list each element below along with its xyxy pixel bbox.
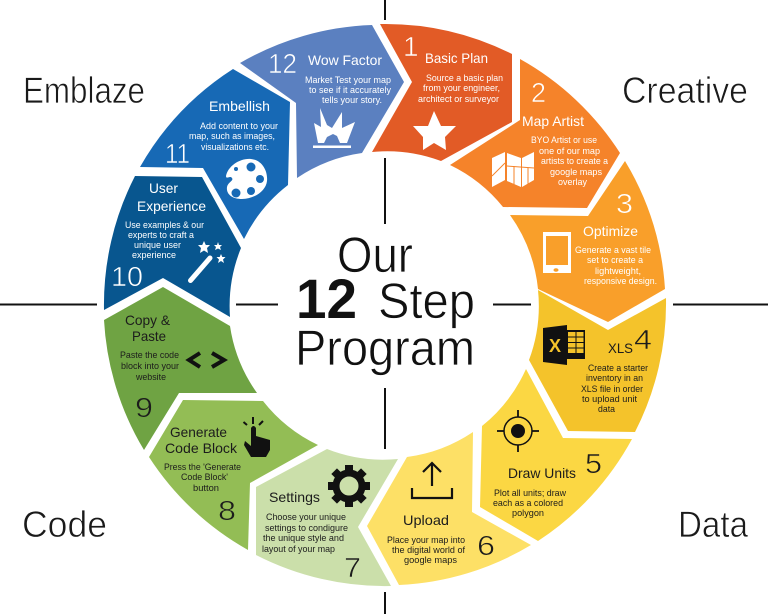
step title: [137, 180, 206, 214]
step description: [120, 350, 179, 383]
step description: data: [598, 404, 616, 415]
segment shape 11: [140, 69, 290, 239]
step description: overlay: [558, 177, 587, 188]
step description: settings to condigure: [265, 523, 348, 534]
heading: Creative: Creative: [622, 70, 748, 111]
panel: step 4 XLS: [529, 290, 666, 432]
step title: User: [149, 180, 178, 196]
step description: the digital world of: [392, 545, 465, 556]
step description: artists to create a: [541, 156, 609, 167]
title: Our 12 Step Program: Our: [337, 227, 413, 283]
panel: step 2 Map Artist: [450, 59, 620, 208]
step title: Wow Factor: [308, 52, 382, 68]
step description: [387, 535, 465, 566]
step number 4: 4: [634, 324, 652, 355]
panel: step 1 Basic Plan: [372, 24, 512, 161]
step description: set to create a: [587, 255, 644, 266]
step description: map, such as images,: [189, 131, 275, 142]
title: Our 12 Step Program: Program: [295, 320, 475, 376]
segment shape 8: [149, 400, 318, 550]
step description: XLS file in order: [581, 384, 643, 395]
step description: Plot all units; draw: [494, 488, 566, 499]
step description: Press the 'Generate: [164, 462, 241, 473]
step description: [575, 245, 657, 287]
step description: [189, 121, 278, 153]
icon: Excel file: [543, 325, 585, 365]
step number 6: 6: [477, 530, 495, 561]
step description: responsive design.: [584, 276, 657, 287]
step description: lightweight,: [595, 266, 641, 277]
icon: Excel file: X: [549, 336, 561, 356]
title: Our 12 Step Program: Step: [378, 273, 475, 329]
heading: Code: Code: [22, 504, 107, 545]
step description: [493, 488, 566, 519]
step description: tells your story.: [322, 95, 382, 106]
panel: step 11 Embellish: [140, 69, 290, 239]
title: Our 12 Step Program: [295, 227, 475, 376]
step title: [165, 424, 238, 456]
step description: google maps: [550, 167, 602, 178]
segment shape 5: [480, 369, 632, 541]
icon: target: [497, 410, 539, 452]
step title: Basic Plan: [425, 50, 488, 66]
panel: step 3 Optimize: [510, 161, 665, 322]
segment shape 9: [104, 287, 257, 450]
step title: Settings: [269, 489, 320, 505]
step number 5: 5: [585, 448, 602, 479]
step description: Paste the code: [120, 350, 179, 361]
step description: [581, 363, 648, 415]
step description: Add content to your: [200, 121, 278, 132]
step description: polygon: [512, 508, 544, 519]
step title: Copy &: [125, 312, 171, 328]
step description: block into your: [121, 361, 179, 372]
icon: folded map: [492, 152, 534, 187]
step description: one of our map: [539, 146, 600, 157]
step description: unique user: [134, 240, 181, 251]
step number 11: 11: [165, 138, 190, 169]
step description: experts to craft a: [128, 230, 195, 241]
step description: to see if it accurately: [309, 85, 391, 96]
panel: step 9 Copy & Paste: [104, 287, 257, 450]
step title: Generate: [170, 424, 227, 440]
step description: Source a basic plan: [426, 73, 503, 84]
step description: the unique style and: [263, 533, 344, 544]
step description: from your engineer,: [423, 83, 500, 94]
step number 7: 7: [344, 552, 361, 583]
step description: [531, 135, 609, 188]
segment shape 4: [529, 290, 666, 432]
step description: Choose your unique: [266, 512, 346, 523]
step title: XLS: [608, 340, 633, 356]
step description: website: [135, 372, 166, 383]
step description: [262, 512, 348, 555]
segment shape 6: [367, 432, 531, 585]
segment shape 12: [240, 25, 404, 178]
panel: step 5 Draw Units: [480, 369, 632, 541]
step description: Use examples & our: [125, 220, 204, 231]
step description: visualizations etc.: [201, 142, 269, 153]
step description: BYO Artist or use: [531, 135, 597, 146]
step description: experience: [132, 250, 176, 261]
step description: inventory in an: [586, 373, 643, 384]
panel: step 8 Generate Code Block: [149, 400, 318, 550]
step number 2: 2: [531, 77, 546, 108]
step number 10: 10: [111, 261, 143, 292]
icon: tapping hand: [244, 417, 270, 457]
icon: paint palette: [226, 159, 267, 199]
icon: magic wand: [190, 241, 226, 280]
panel: step 12 Wow Factor: [240, 25, 404, 178]
step description: [125, 220, 204, 261]
step description: layout of your map: [262, 544, 335, 555]
step description: [164, 462, 241, 494]
step description: button: [193, 483, 219, 494]
step number 8: 8: [218, 495, 236, 526]
step description: each as a colored: [493, 498, 563, 509]
step title: Code Block: [165, 440, 238, 456]
icon: gear: [328, 465, 370, 507]
heading: Emblaze: Emblaze: [23, 70, 145, 111]
step description: [305, 75, 391, 106]
step description: [418, 73, 503, 105]
heading: Data: Data: [678, 504, 748, 545]
step number 9: 9: [135, 392, 153, 423]
segment shape 1: [372, 24, 512, 161]
step title: Upload: [403, 512, 449, 528]
title: Our 12 Step Program: 12: [296, 267, 357, 330]
icon: tablet: [543, 232, 571, 273]
step title: Paste: [132, 328, 166, 344]
step description: Place your map into: [387, 535, 465, 546]
segment shape 2: [450, 59, 620, 208]
step title: Draw Units: [508, 465, 576, 481]
step title: [125, 312, 171, 344]
segment shape 7: [256, 449, 398, 586]
step description: to upload unit: [582, 394, 637, 405]
step title: Optimize: [583, 223, 638, 239]
step description: google maps: [404, 555, 457, 566]
panel: step 7 Settings: [256, 449, 398, 586]
step title: Embellish: [209, 98, 270, 114]
panel: step 10 User Experience: [104, 176, 241, 317]
step description: Market Test your map: [305, 75, 391, 86]
step description: architect or surveyor: [418, 94, 499, 105]
icon: upload arrow: [412, 463, 452, 498]
segment shape 3: [510, 161, 665, 322]
step description: Create a starter: [588, 363, 648, 374]
segment shape 10: [104, 176, 241, 317]
panel: step 6 Upload: [367, 432, 531, 585]
step title: Map Artist: [522, 113, 584, 129]
step number 12: 12: [268, 48, 297, 79]
icon: code brackets: [189, 353, 224, 367]
step number 3: 3: [616, 188, 633, 219]
step description: Code Block': [181, 472, 228, 483]
icon: explosion: [313, 108, 355, 148]
step number 1: 1: [403, 31, 419, 62]
icon: star: [413, 111, 456, 150]
step description: Generate a vast tile: [575, 245, 651, 256]
step title: Experience: [137, 198, 206, 214]
